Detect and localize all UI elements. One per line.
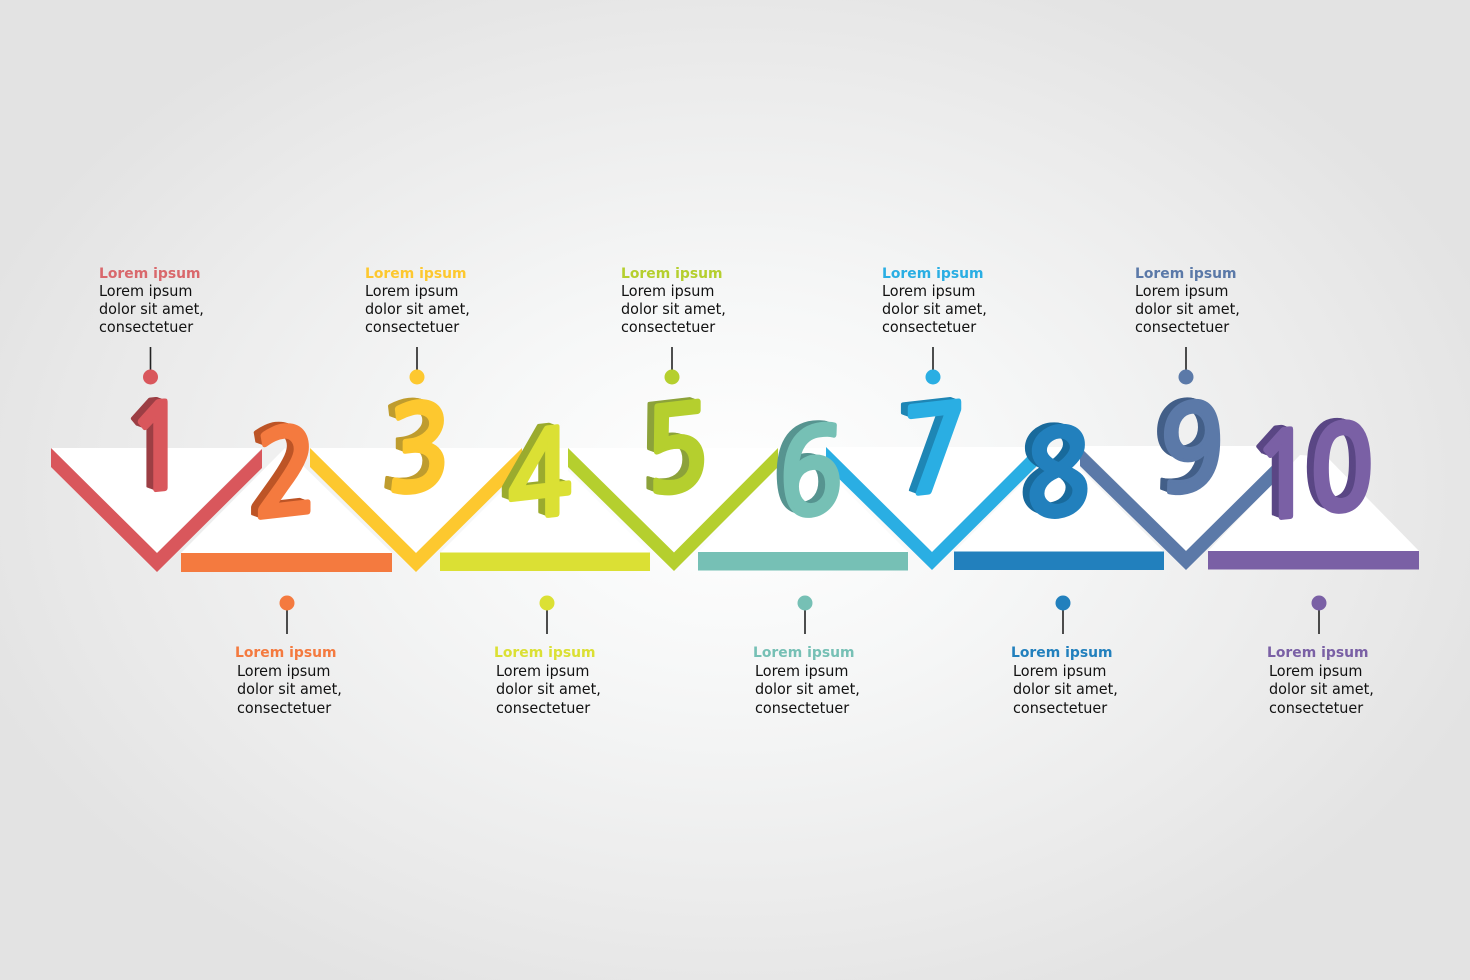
number 5: 5 [644,389,710,514]
number 7: 7 [902,389,968,514]
number 8: 8 [1025,413,1091,538]
number 10: 10 [1251,409,1367,540]
text block 9: dolor sit amet, [1135,301,1240,318]
text block 6: consectetuer [755,700,849,717]
number 9: 9 [1159,388,1225,513]
text block 8 [1011,645,1118,717]
number 1: 1 [125,387,191,512]
text block 9 [1135,266,1240,336]
text block 1 [99,266,204,336]
text block 1: dolor sit amet, [99,301,204,318]
text block 1: Lorem ipsum [99,266,201,282]
text block 4: Lorem ipsum [496,663,589,680]
text block 9: consectetuer [1135,319,1229,336]
bar 10 [1208,551,1419,570]
text block 5: dolor sit amet, [621,301,726,318]
text block 3: Lorem ipsum [365,283,458,300]
text block 5: Lorem ipsum [621,266,723,282]
text block 6: Lorem ipsum [755,663,848,680]
text block 3 [365,266,470,336]
text block 1: Lorem ipsum [99,283,192,300]
text block 9: Lorem ipsum [1135,266,1237,282]
text block 2: Lorem ipsum [237,663,330,680]
text block 1: consectetuer [99,319,193,336]
text block 4 [494,645,601,717]
text block 4: Lorem ipsum [494,645,596,661]
number 2: 2 [253,412,319,537]
connector pins [143,347,1326,634]
text block 6: Lorem ipsum [753,645,855,661]
text block 9: Lorem ipsum [1135,283,1228,300]
text block 6 [753,645,860,717]
text block 7: dolor sit amet, [882,301,987,318]
white ribbon surface [51,446,1419,553]
text block 10: Lorem ipsum [1267,645,1369,661]
bar 6 [698,552,908,570]
text block 6: dolor sit amet, [755,681,860,698]
text block 5: Lorem ipsum [621,283,714,300]
bar 8 [954,552,1164,570]
number 3: 3 [386,388,452,513]
text block 5: consectetuer [621,319,715,336]
text block 2: Lorem ipsum [235,645,337,661]
zigzag arm 7 [826,447,1037,570]
text block 2 [235,645,342,717]
text block 7 [882,266,987,336]
text block 2: consectetuer [237,700,331,717]
zigzag arm 9 [1080,446,1292,570]
text block 10 [1267,645,1374,717]
text block 7: Lorem ipsum [882,283,975,300]
zigzag arm 5 [568,448,778,571]
zigzag arm 1 [51,448,262,572]
text block 5 [621,266,726,336]
text block 10: consectetuer [1269,700,1363,717]
text block 10: dolor sit amet, [1269,681,1374,698]
text block 10: Lorem ipsum [1269,663,1362,680]
text block 7: Lorem ipsum [882,266,984,282]
text block 2: dolor sit amet, [237,681,342,698]
bar 2 [181,553,392,572]
text block 3: consectetuer [365,319,459,336]
text block 7: consectetuer [882,319,976,336]
text block 3: dolor sit amet, [365,301,470,318]
text block 4: consectetuer [496,700,590,717]
text block 3: Lorem ipsum [365,266,467,282]
zigzag arm 3 [310,448,522,572]
number 4: 4 [507,414,573,539]
text block 4: dolor sit amet, [496,681,601,698]
bar 4 [440,552,650,571]
number 6: 6 [778,412,844,537]
text block 8: Lorem ipsum [1013,663,1106,680]
text block 8: consectetuer [1013,700,1107,717]
text block 8: Lorem ipsum [1011,645,1113,661]
text block 8: dolor sit amet, [1013,681,1118,698]
